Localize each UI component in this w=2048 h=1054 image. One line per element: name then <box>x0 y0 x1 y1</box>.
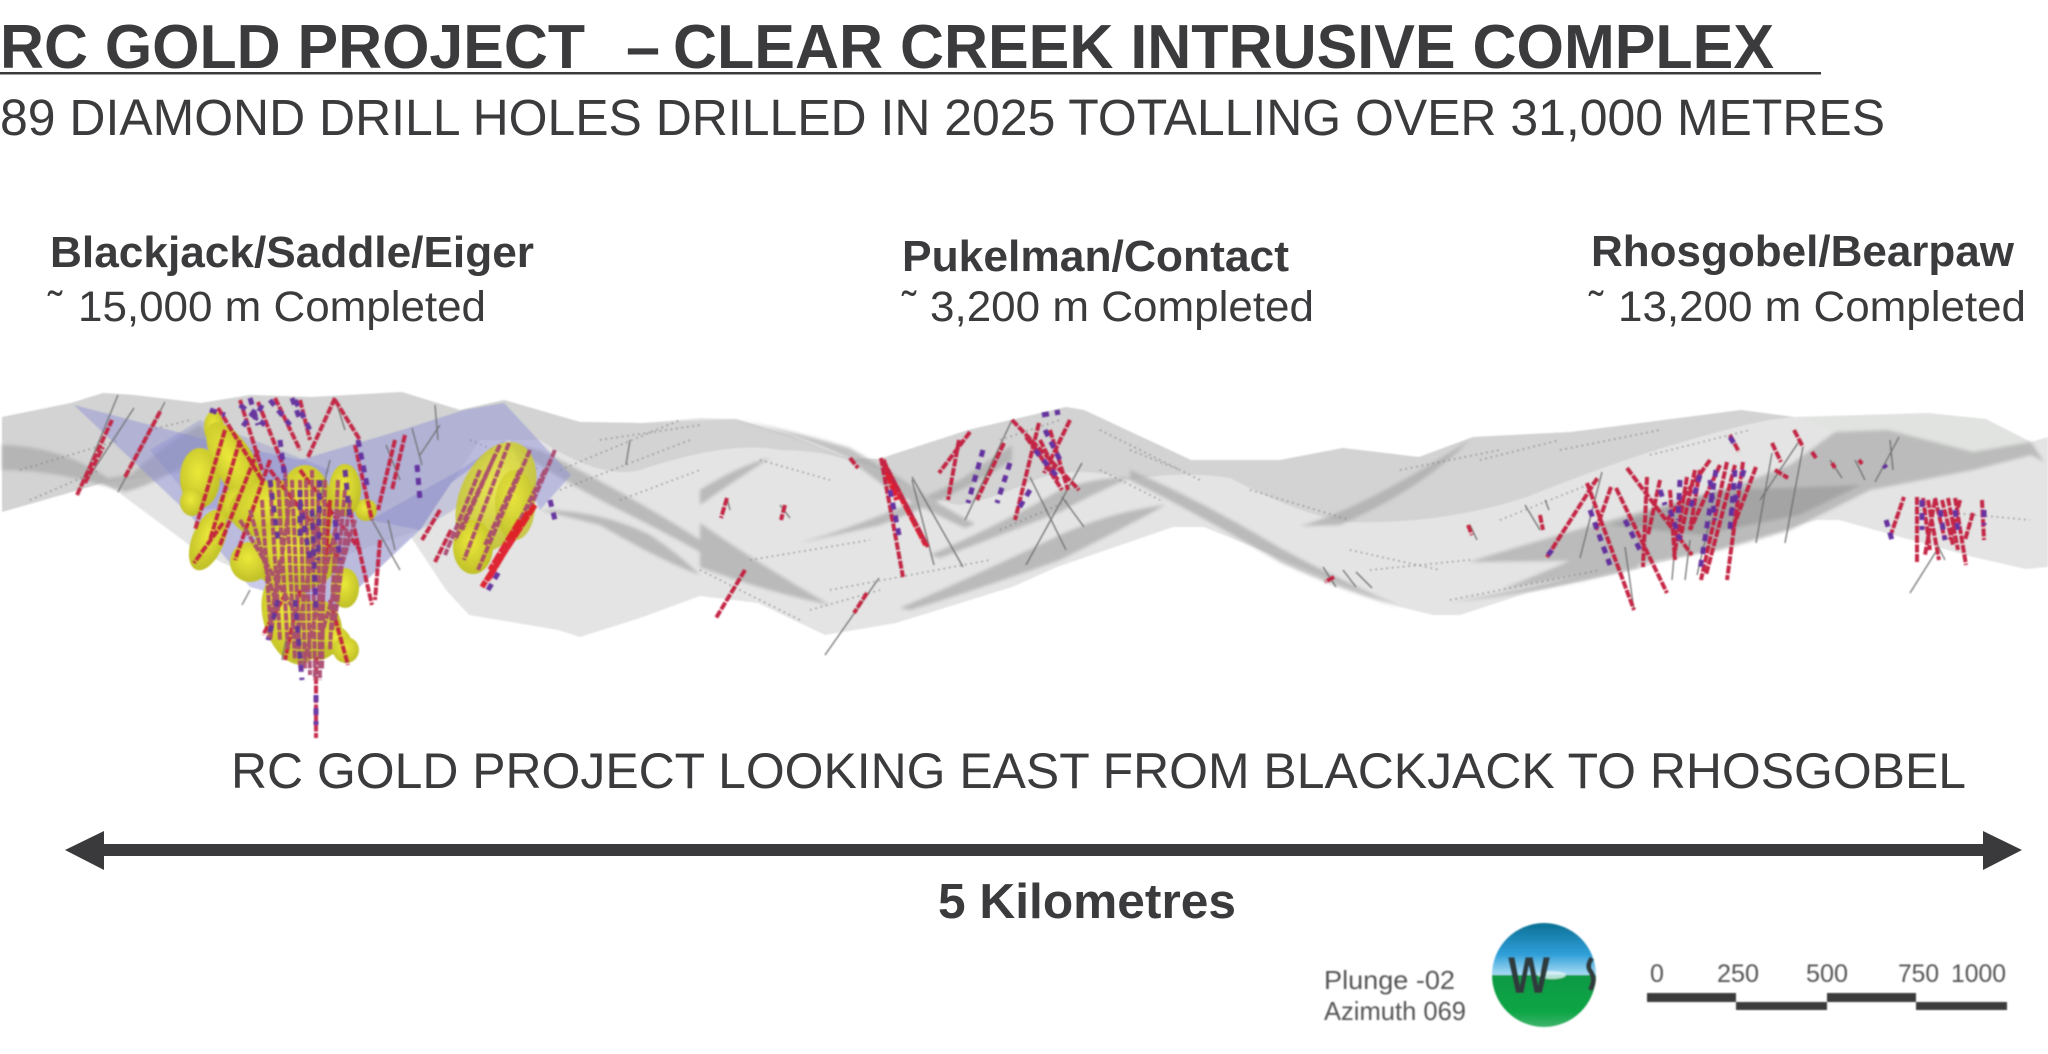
caption: RC GOLD PROJECT LOOKING EAST FROM BLACKJACK TO RHOSGOBEL <box>231 743 1966 799</box>
drill holes: Eiger east lobe <box>422 443 555 590</box>
double-headed arrow <box>65 831 2022 870</box>
title <box>0 13 1821 82</box>
scale bar: 500 <box>1806 960 1848 988</box>
title: – <box>626 13 660 82</box>
plunge and azimuth: Plunge -02 <box>1324 965 1455 995</box>
icon: orientation globe: W <box>1508 947 1551 1005</box>
label: Blackjack/Saddle/Eiger: 15,000 m Completed <box>78 283 486 331</box>
label: Pukelman/Contact: Pukelman/Contact <box>902 232 1289 281</box>
intrusive envelope: translucent blue wireframe surface <box>74 403 571 610</box>
plunge and azimuth: Azimuth 069 <box>1324 996 1466 1026</box>
plunge and azimuth <box>1324 965 1466 1026</box>
scale bar <box>1647 960 2007 1010</box>
gold mineralization shells (yellow) <box>180 411 552 672</box>
label: Blackjack/Saddle/Eiger <box>47 228 534 331</box>
title: RC GOLD PROJECT <box>0 13 585 82</box>
label: Pukelman/Contact: ˜ <box>901 283 917 331</box>
scale bar: 250 <box>1717 960 1759 988</box>
drill holes: Rhosgobel / Bearpaw <box>1468 430 1984 610</box>
terrain surface <box>2 392 2048 637</box>
subtitle: 89 DIAMOND DRILL HOLES DRILLED IN 2025 TOTALLING OVER 31,000 METRES <box>0 89 1885 146</box>
title: CLEAR CREEK INTRUSIVE COMPLEX <box>673 13 1774 82</box>
label: Blackjack/Saddle/Eiger: Blackjack/Saddle/Eiger <box>50 228 534 277</box>
scale bar: 0 <box>1650 960 1664 988</box>
scale bar: 750 <box>1898 960 1939 988</box>
drill holes: Pukelman / Contact <box>716 412 1372 655</box>
label: Blackjack/Saddle/Eiger: ˜ <box>47 283 63 331</box>
distance label: 5 Kilometres <box>938 875 1236 929</box>
dark fold bands <box>2 420 2044 610</box>
scale bar: 1000 <box>1951 960 2006 988</box>
label: Rhosgobel/Bearpaw <box>1588 227 2026 331</box>
stippled surface edges <box>20 420 2030 610</box>
3D long section: terrain, intrusive complex and drill holes <box>2 392 2048 738</box>
label: Rhosgobel/Bearpaw: ˜ <box>1588 283 1604 331</box>
upper terrain shade <box>2 392 1794 560</box>
label: Pukelman/Contact <box>901 232 1314 331</box>
label: Rhosgobel/Bearpaw: Rhosgobel/Bearpaw <box>1591 227 2015 276</box>
label: Rhosgobel/Bearpaw: 13,200 m Completed <box>1618 283 2026 331</box>
label: Pukelman/Contact: 3,200 m Completed <box>930 283 1314 331</box>
icon: orientation globe <box>1492 923 1596 1027</box>
drill holes: Blackjack / Saddle / Eiger <box>77 395 630 738</box>
